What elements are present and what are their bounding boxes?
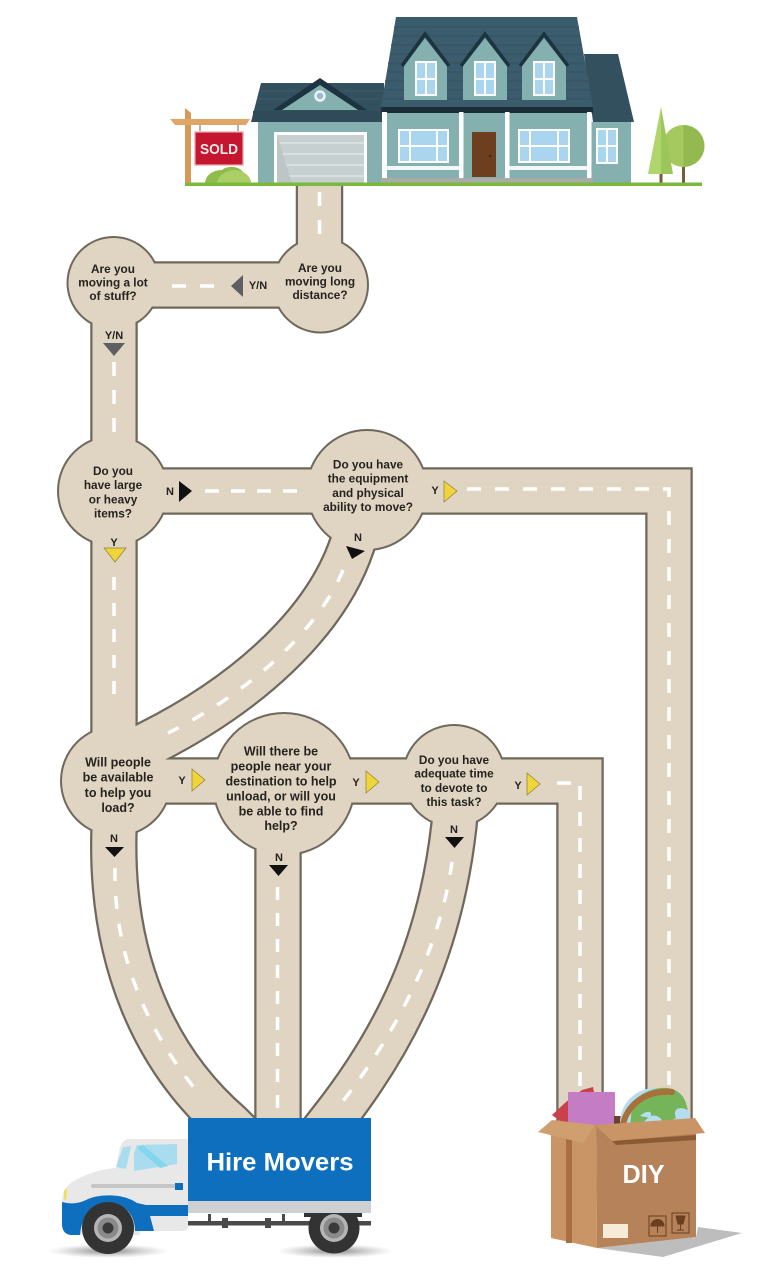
sold sign: SOLD: [200, 141, 238, 158]
box shadow: [597, 1227, 742, 1257]
decision: adequate time: adequate time: [414, 766, 494, 780]
arrow: N down: N: [110, 833, 118, 845]
decision: people available to load: Will people: [85, 756, 151, 770]
arrow: N right: N: [166, 486, 174, 498]
arrow: Y/N down: Y/N: [105, 330, 123, 342]
truck box: Hire Movers: [188, 1118, 371, 1213]
arrow: Y right: [431, 481, 457, 502]
shrubs: [205, 167, 251, 183]
arrow: Y right: Y: [514, 780, 522, 792]
decision: moving a lot of stuff: moving a lot: [78, 276, 148, 290]
decision: adequate time: to devote to: [421, 781, 487, 795]
decision: moving long distance: [231, 238, 367, 332]
truck box: Hire Movers: Hire Movers: [206, 1148, 354, 1176]
arrow: N down: [105, 833, 124, 857]
handling icons: [649, 1213, 689, 1236]
right wing: [584, 54, 634, 184]
arrow: Y right: [352, 771, 379, 793]
cab windows: [116, 1144, 177, 1171]
sold sign: [170, 108, 250, 183]
truck chassis: [188, 1213, 371, 1228]
decision: people available to load: to help you: [85, 786, 151, 800]
decision: large or heavy items: or heavy: [89, 492, 138, 506]
decision: moving long distance: Are you: [298, 261, 342, 275]
decision: large or heavy items: [59, 437, 192, 562]
wheel shadows: [48, 1244, 393, 1258]
decision: equipment and physical ability: the equipment: [328, 472, 408, 486]
decision: moving long distance: moving long: [285, 274, 355, 288]
truck cab: [62, 1139, 188, 1235]
arrow: Y right: Y: [178, 775, 186, 787]
trees: [648, 107, 704, 183]
road network: [57, 180, 669, 1140]
road centre dashes: [114, 192, 669, 1112]
illustration: DIY box: [538, 1087, 742, 1257]
decision: equipment and physical ability: [308, 431, 457, 559]
decision: large or heavy items: items?: [94, 506, 132, 520]
decision: people available to load: load?: [101, 801, 135, 815]
arrow: Y down: Y: [110, 537, 118, 549]
box contents: [552, 1087, 690, 1125]
decision: equipment and physical ability: Do you have: [333, 458, 404, 472]
decision: people available to load: [62, 727, 205, 857]
main roof: [381, 17, 593, 113]
arrow: N diagonal: N: [354, 532, 362, 544]
truck wheels: [82, 1202, 360, 1254]
box body: [538, 1118, 705, 1248]
decision: people at destination to unload: help?: [264, 819, 298, 833]
decision: adequate time: Do you have: [419, 753, 490, 767]
arrow: N diagonal: [346, 532, 365, 559]
decision: equipment and physical ability: and physical: [332, 486, 404, 500]
decision: adequate time: this task?: [426, 795, 482, 809]
decision: large or heavy items: have large: [84, 478, 143, 492]
arrow: N down: N: [275, 852, 283, 864]
decision: people at destination to unload: [214, 714, 379, 876]
decision: people at destination to unload: Will there be: [244, 744, 318, 758]
decision: people at destination to unload: destination to help: [225, 774, 337, 788]
decision: moving a lot of stuff: of stuff?: [89, 289, 137, 303]
decision: equipment and physical ability: ability to move?: [323, 500, 413, 514]
arrow: Y right: Y: [352, 777, 360, 789]
dormers: [402, 34, 568, 100]
arrow: Y right: Y: [431, 485, 439, 497]
arrow: N down: N: [450, 824, 458, 836]
illustration: moving truck: [48, 1118, 393, 1258]
decision: people at destination to unload: be able to find: [239, 804, 323, 818]
arrow: Y/N left: Y/N: [249, 280, 267, 292]
decision: moving a lot of stuff: [68, 238, 158, 356]
ground: [185, 182, 702, 186]
DIY label: DIY: [622, 1159, 664, 1189]
decision: adequate time: [404, 726, 540, 848]
decision: people available to load: be available: [83, 770, 153, 784]
decision: moving long distance: distance?: [292, 288, 348, 302]
decision: people at destination to unload: unload, or will you: [226, 790, 336, 804]
decision: moving a lot of stuff: Are you: [91, 262, 135, 276]
main wall and porch: [381, 112, 593, 183]
arrow: Y right: [178, 769, 205, 791]
garage: [251, 78, 384, 184]
decision: large or heavy items: Do you: [93, 464, 133, 478]
decision: people at destination to unload: people near your: [231, 760, 331, 774]
arrow: N down: [269, 852, 288, 876]
illustration: house with sold sign: [170, 17, 704, 186]
